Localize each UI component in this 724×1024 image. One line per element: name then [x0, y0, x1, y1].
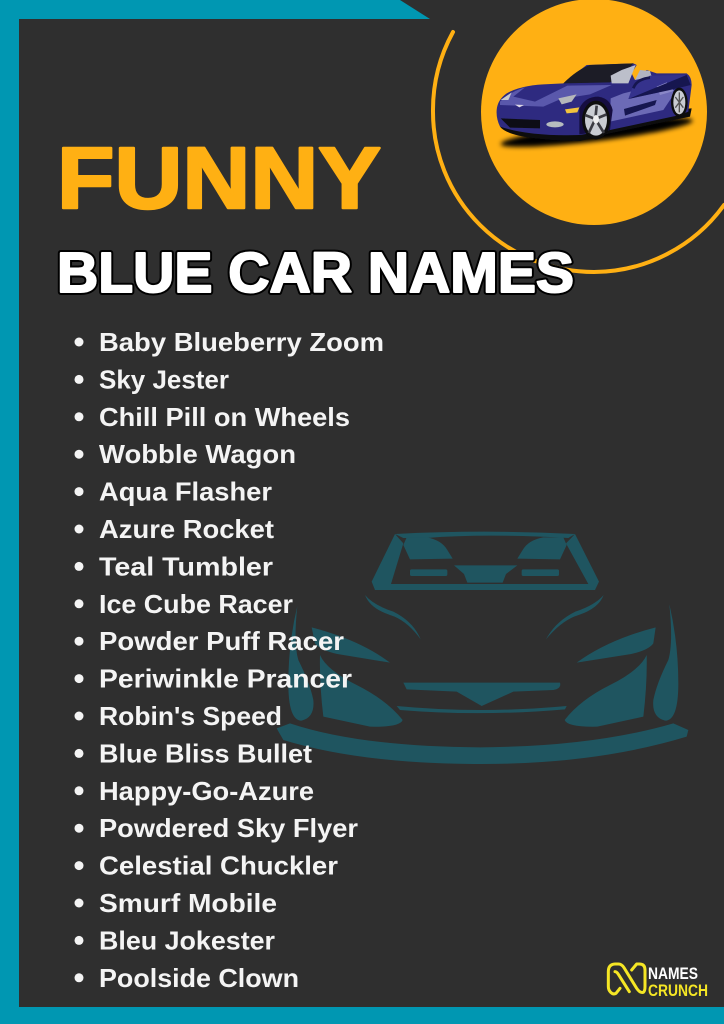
- name list: Smurf Mobile: [99, 888, 277, 918]
- name list: Celestial Chuckler: [99, 851, 338, 881]
- ghost car silhouette: [277, 532, 688, 764]
- name list: Aqua Flasher: [99, 477, 272, 507]
- front wheel: [582, 101, 610, 139]
- name list: Periwinkle Prancer: [99, 664, 352, 694]
- name list: Baby Blueberry Zoom: [99, 327, 384, 357]
- title: FUNNY: FUNNY: [57, 130, 381, 227]
- name list: Robin's Speed: [99, 701, 282, 731]
- subtitle: BLUE CAR NAMES: BLUE CAR NAMES: [57, 241, 574, 305]
- car body: [497, 63, 692, 135]
- icon: logo N mark: [608, 964, 645, 994]
- name list: Powder Puff Racer: [99, 626, 344, 656]
- logo wordmark: CRUNCH: CRUNCH: [648, 981, 708, 1000]
- name list: [74, 327, 384, 993]
- orange circle: [481, 0, 707, 225]
- name list: Powdered Sky Flyer: [99, 813, 358, 843]
- name list: Ice Cube Racer: [99, 589, 293, 619]
- logo wordmark: NAMES: NAMES: [648, 964, 698, 983]
- name list: Wobble Wagon: [99, 439, 296, 469]
- name list: Poolside Clown: [99, 963, 299, 993]
- name list: Azure Rocket: [99, 514, 274, 544]
- name list: Teal Tumbler: [99, 551, 273, 581]
- subtitle: BLUE CAR NAMES: BLUE CAR NAMES: [57, 241, 574, 305]
- name list: Bleu Jokester: [99, 925, 275, 955]
- icon: blue convertible car: [497, 63, 694, 153]
- rear wheel: [671, 88, 688, 117]
- name list: Blue Bliss Bullet: [99, 738, 312, 768]
- name list: Sky Jester: [99, 364, 229, 394]
- name list: Chill Pill on Wheels: [99, 402, 350, 432]
- decorative ring arc: [433, 32, 724, 272]
- name list: Happy-Go-Azure: [99, 776, 314, 806]
- logo: Names Crunch: [608, 964, 708, 1000]
